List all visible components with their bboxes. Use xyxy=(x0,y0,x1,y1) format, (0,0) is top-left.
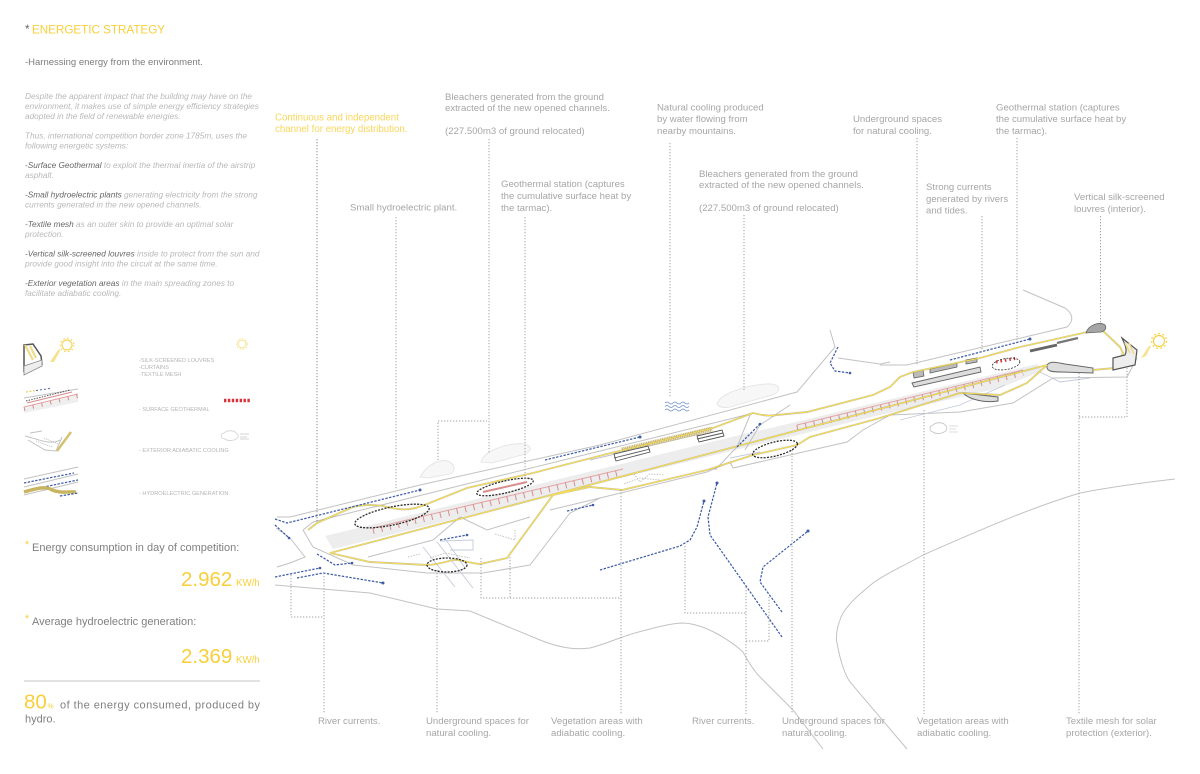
legend labels: -TEXTILE MESH xyxy=(139,372,181,378)
stat: hydroelectric generation xyxy=(25,613,260,668)
label: strong currents: Strong currents xyxy=(926,182,992,193)
text block: introduction and energetic systems: -Surface Geothermal to exploit the thermal inertia of the airstrip xyxy=(25,161,256,170)
text block: introduction and energetic systems: environment, it makes use of simple energy efficiency strategies xyxy=(25,102,259,111)
label: bleachers east: Bleachers generated from the ground xyxy=(699,169,858,180)
label: energy channel: channel for energy distribution. xyxy=(275,124,407,135)
legend thumbnail: louvres and sun xyxy=(24,338,74,375)
legend labels: - EXTERIOR ADIABATIC COOLING xyxy=(139,448,229,454)
label: river currents west: River currents. xyxy=(318,716,380,727)
text block: introduction and energetic systems: -Vertical silk-screened louvres inside to protect from the sun and xyxy=(25,250,260,258)
label: geothermal station east: the cumulative surface heat by xyxy=(996,114,1126,125)
stat: hydroelectric generation: 2.369 xyxy=(181,645,232,668)
text block: introduction and energetic systems: -Small hydroelectric plants generating electricity from the strong xyxy=(25,190,258,200)
legend thumbnail: surface geothermal xyxy=(24,388,78,413)
runway surface xyxy=(325,364,1042,549)
icon: sun and solar ray xyxy=(1141,334,1166,358)
label: underground spaces west xyxy=(426,716,530,739)
label: geothermal station west: Geothermal station (captures xyxy=(501,179,625,190)
label: small hydroelectric plant: Small hydroelectric plant. xyxy=(350,202,457,214)
stat: energy consumption: Energy consumption in day of competition: xyxy=(32,542,239,554)
legend labels: -SILK-SCREENED LOUVRES xyxy=(139,358,214,364)
legend labels: - SURFACE GEOTHERMAL xyxy=(139,407,210,413)
legend icon: sun xyxy=(237,339,247,349)
stat: 80 percent from hydro: 80 xyxy=(24,690,47,714)
subtitle: -Harnessing energy from the environment. xyxy=(25,57,203,68)
label: vegetation areas west: adiabatic cooling. xyxy=(551,728,625,739)
text block: introduction and energetic systems: currents generated in the new opened channels. xyxy=(25,200,202,210)
stat: hydroelectric generation: * xyxy=(25,613,29,625)
stat: energy consumption: 2.962 xyxy=(181,568,232,591)
stat: hydroelectric generation: KW/h xyxy=(236,655,260,666)
text block: introduction and energetic systems: following energetic systems: xyxy=(25,142,128,150)
label: underground spaces east: natural cooling. xyxy=(782,728,847,739)
ground contour lines xyxy=(275,290,1175,749)
text block: introduction and energetic systems: asphalt. xyxy=(25,171,54,180)
text block: introduction and energetic systems: -Textile mesh as an outer skin to provide an optimal solar xyxy=(25,220,235,229)
dotted leader lines xyxy=(291,138,1127,714)
label: geothermal station west: the tarmac). xyxy=(501,203,552,214)
bleachers xyxy=(614,338,1093,461)
label: vegetation areas east xyxy=(917,716,1009,739)
label: underground spaces east: Underground spaces for xyxy=(782,716,886,727)
label: bleachers east xyxy=(699,169,864,214)
title: * xyxy=(25,23,30,36)
underground cooling ovals xyxy=(353,356,1021,572)
stat: 80 percent from hydro: of the energy consumed, produced by xyxy=(60,700,260,712)
stat: energy consumption: * xyxy=(25,539,29,551)
ground blobs xyxy=(420,384,779,478)
text block: introduction and energetic systems: provide good insight into the circuit at the same time. xyxy=(24,260,218,268)
red geothermal ticks xyxy=(373,358,1023,531)
legend labels: - HYDROELECTRIC GENERATION xyxy=(139,491,228,497)
label: textile mesh: Textile mesh for solar xyxy=(1066,716,1157,727)
blue current arrows xyxy=(275,338,1032,637)
legend icon: geothermal red marks xyxy=(224,399,250,402)
label: geothermal station east: Geothermal station (captures xyxy=(996,102,1120,114)
label: geothermal station east xyxy=(996,102,1126,137)
text block: introduction and energetic systems: adopted in the field of renewable energies. xyxy=(25,112,180,121)
label: vegetation areas east: Vegetation areas with xyxy=(917,716,1009,727)
site boundary lines xyxy=(303,358,1137,573)
label: energy channel: Continuous and independent xyxy=(275,112,399,124)
label: bleachers east: (227.500m3 of ground relocated) xyxy=(699,203,839,214)
label: underground spaces top: for natural cooling. xyxy=(853,126,932,137)
stat: 80 percent from hydro: % xyxy=(48,704,54,710)
label: vertical louvres: Vertical silk-screened xyxy=(1074,192,1165,203)
label: vegetation areas east: adiabatic cooling. xyxy=(917,728,991,739)
label: natural cooling: nearby mountains. xyxy=(657,126,736,137)
label: bleachers west: Bleachers generated from the ground xyxy=(445,92,604,103)
legend thumbnail: adiabatic cooling xyxy=(25,431,71,451)
label: natural cooling: by water flowing from xyxy=(657,114,748,125)
text block: introduction and energetic systems: facilitate adiabatic cooling. xyxy=(25,289,121,298)
stat: hydroelectric generation: Average hydroelectric generation: xyxy=(32,616,196,628)
label: strong currents xyxy=(926,182,1008,216)
label: river currents east: River currents. xyxy=(692,716,754,727)
stat: 80 percent from hydro xyxy=(24,690,260,726)
label: strong currents: generated by rivers xyxy=(926,194,1008,205)
label: geothermal station east: the tarmac). xyxy=(996,126,1047,137)
label: vegetation areas west: Vegetation areas with xyxy=(551,716,643,727)
text block: introduction and energetic systems: -Exterior vegetation areas in the main spreading zones to xyxy=(25,279,235,288)
stat: energy consumption xyxy=(25,539,260,591)
vegetation scribbles xyxy=(408,474,664,558)
label: textile mesh: protection (exterior). xyxy=(1066,728,1152,739)
legend labels xyxy=(139,358,229,497)
label: natural cooling xyxy=(657,102,764,137)
label: textile mesh xyxy=(1066,716,1157,739)
label: strong currents: and tides. xyxy=(926,206,968,216)
label: underground spaces top: Underground spaces xyxy=(853,114,942,125)
label: vertical louvres xyxy=(1074,192,1165,215)
label: bleachers east: extracted of the new opened channels. xyxy=(699,180,864,191)
label: underground spaces top xyxy=(853,114,942,137)
label: bleachers west: extracted of the new opened channels. xyxy=(445,103,610,114)
stat: energy consumption: KW/h xyxy=(236,578,260,589)
icon: site cloud xyxy=(930,423,958,434)
label: underground spaces west: Underground spaces for xyxy=(426,716,530,727)
label: underground spaces east xyxy=(782,716,886,739)
north end cap with louvres xyxy=(1086,323,1137,370)
label: vegetation areas west xyxy=(551,716,643,739)
legend labels: -CURTAINS xyxy=(139,365,169,371)
yellow energy channel xyxy=(308,328,1123,565)
label: bleachers west: (227.500m3 of ground relocated) xyxy=(445,126,585,137)
stat: 80 percent from hydro: hydro. xyxy=(25,714,56,726)
service lines xyxy=(423,372,1090,588)
label: bleachers west xyxy=(445,92,610,137)
label: energy channel xyxy=(275,112,407,135)
icon: water waves xyxy=(665,402,689,411)
label: underground spaces west: natural cooling. xyxy=(426,728,491,739)
label: geothermal station west: the cumulative surface heat by xyxy=(501,191,631,202)
label: natural cooling: Natural cooling produced xyxy=(657,102,764,114)
text block: introduction and energetic systems: Thus, international competition border zone 1785m, uses the xyxy=(25,132,247,140)
text block: introduction and energetic systems: Despite the apparent impact that the building may have on the xyxy=(25,92,252,101)
site plan xyxy=(275,290,1175,749)
text block: introduction and energetic systems: protection. xyxy=(24,230,64,239)
title: ENERGETIC STRATEGY xyxy=(32,24,165,36)
label: vertical louvres: louvres (interior). xyxy=(1074,204,1146,215)
text block: introduction and energetic systems xyxy=(24,92,260,298)
label: geothermal station west xyxy=(501,179,631,214)
legend thumbnail: hydroelectric generation xyxy=(24,467,78,496)
legend icon: cloud xyxy=(221,431,249,440)
